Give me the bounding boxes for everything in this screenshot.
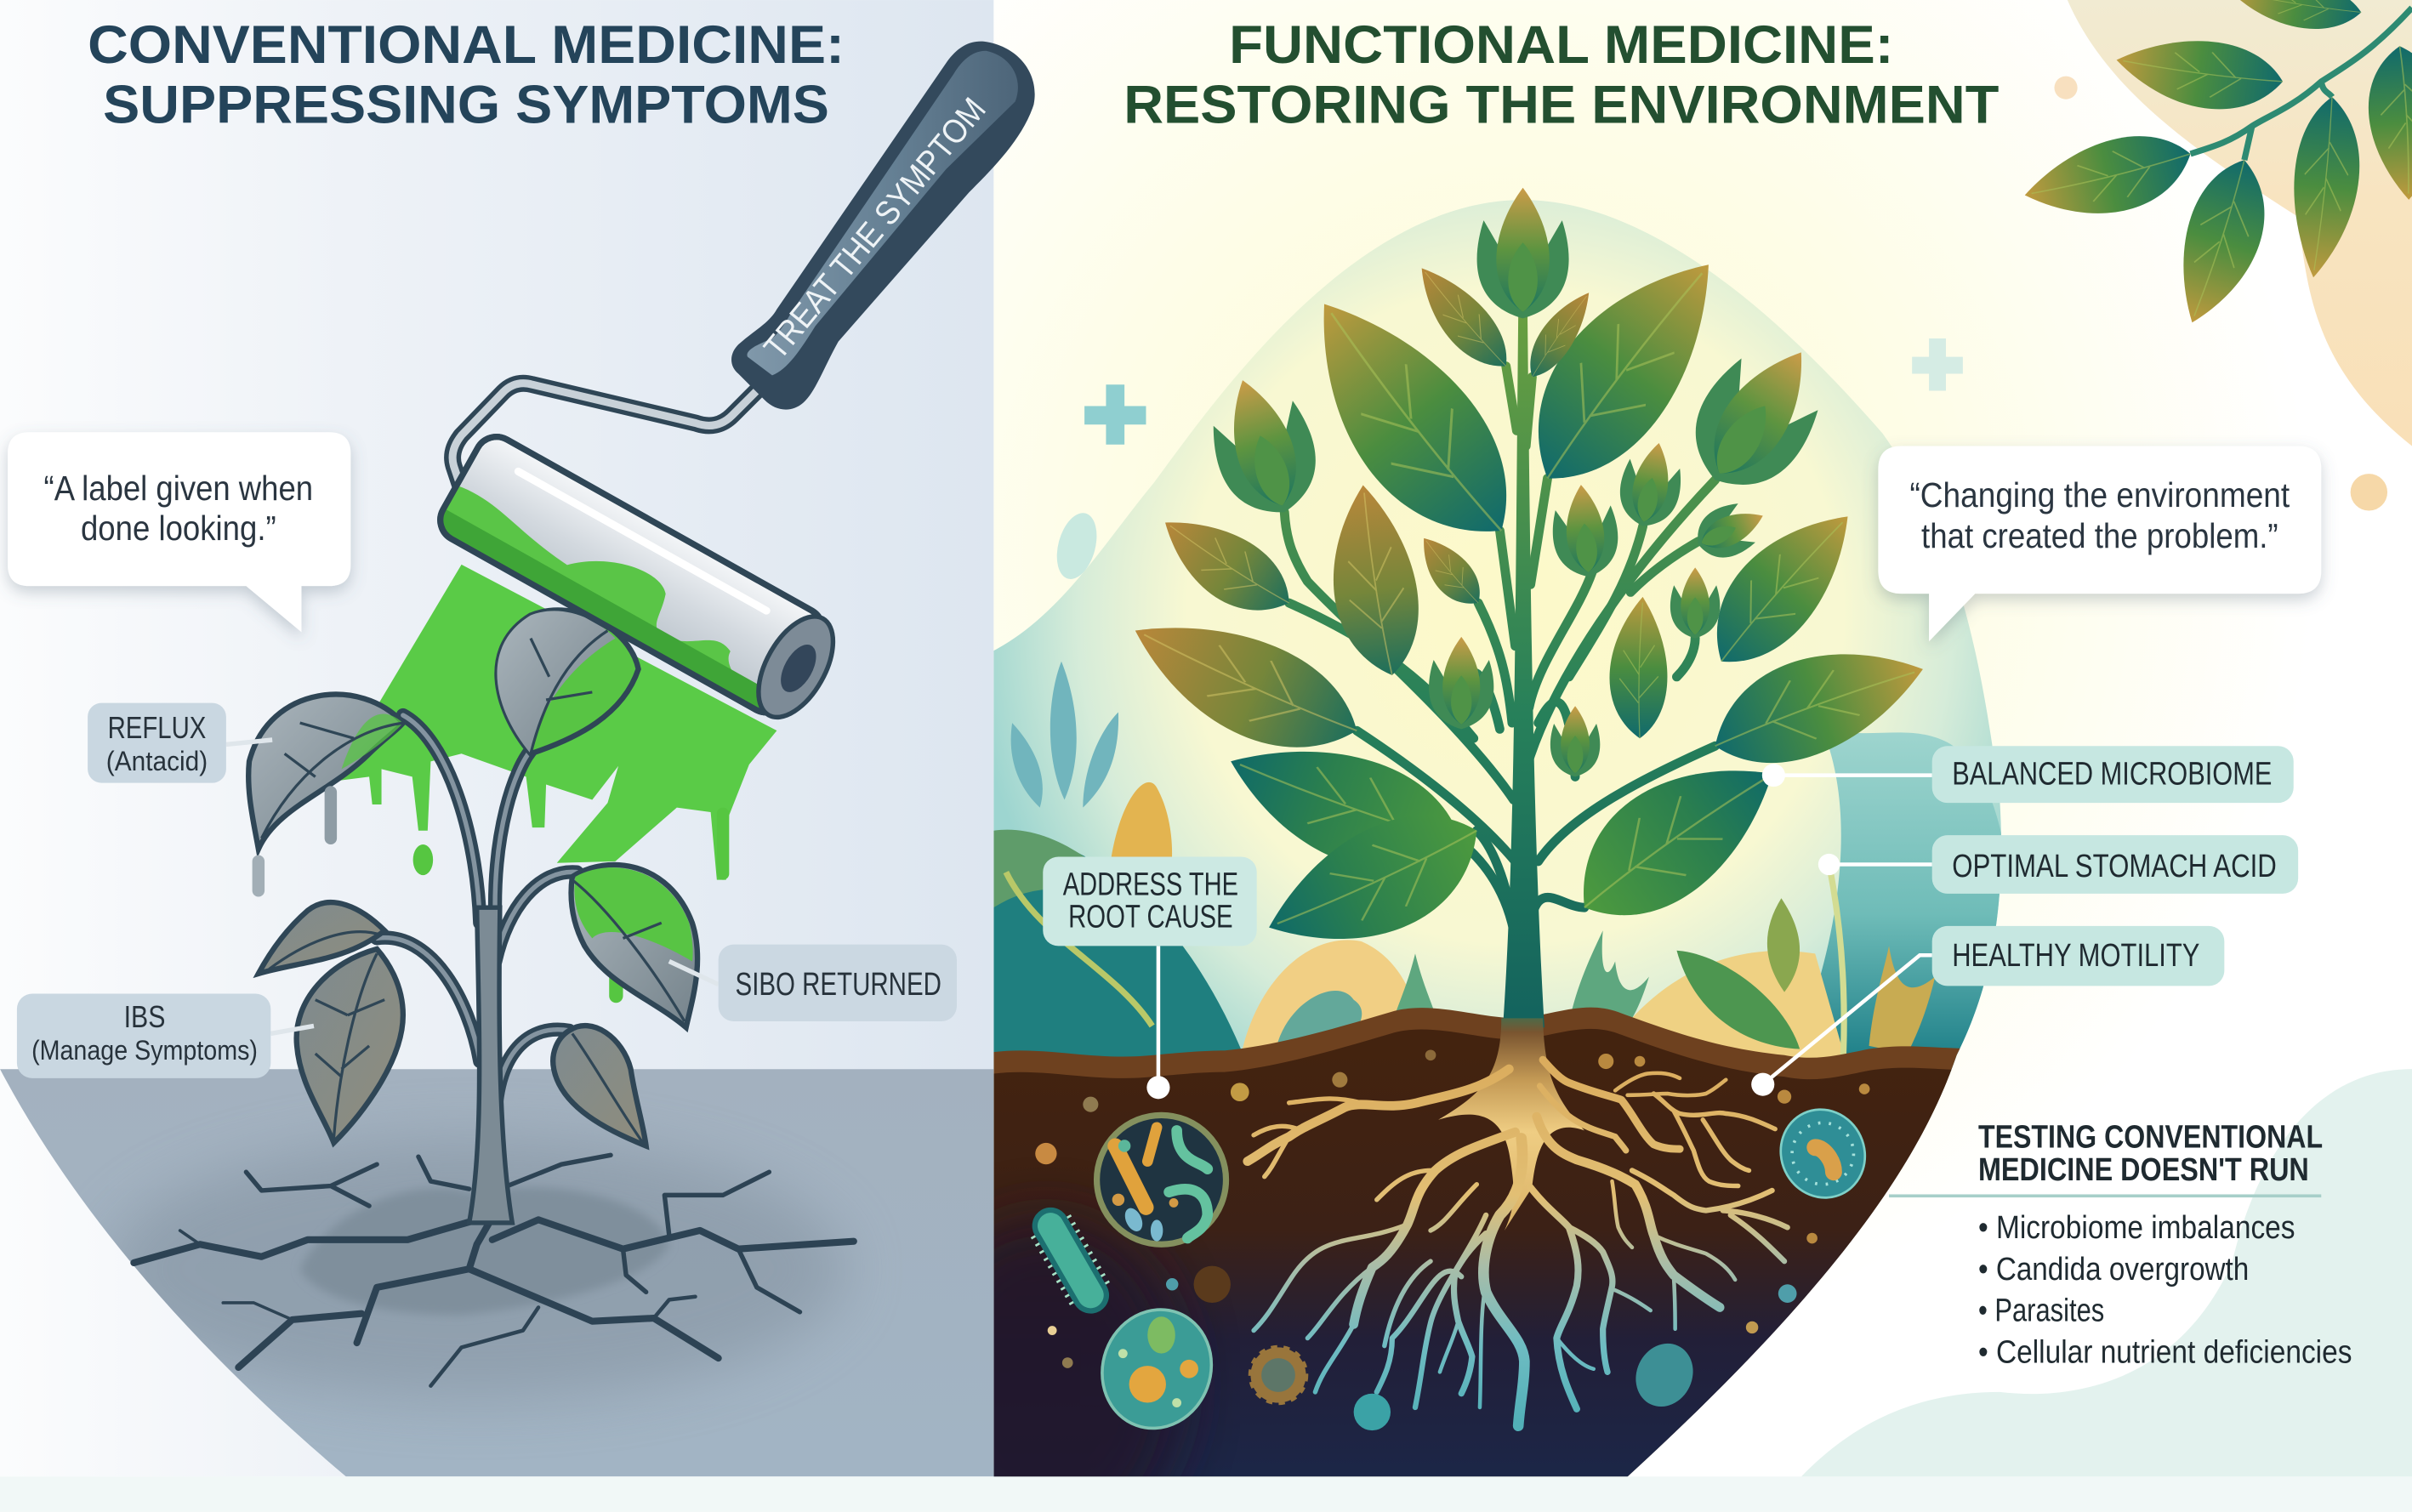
stems outline	[377, 715, 577, 1123]
label: balanced microbiome	[1932, 746, 2294, 803]
bud: horizontal	[1688, 493, 1773, 567]
paint roller	[433, 42, 1035, 730]
leaf: upper left big	[1271, 270, 1545, 571]
grey drop	[253, 855, 265, 896]
background teal shrub	[1277, 991, 1362, 1043]
text block: testing conventional medicine doesn't run	[1889, 1119, 2352, 1371]
soil surface band	[993, 1008, 1984, 1476]
leaf: right upper paint	[574, 867, 693, 961]
background hill right	[1633, 951, 1840, 1058]
connector: reflux	[226, 740, 272, 744]
label: address the root cause: ROOT CAUSE	[1068, 900, 1233, 935]
roots	[1248, 1018, 1788, 1426]
bud: right small	[1670, 567, 1720, 639]
background foliage left lime	[993, 830, 1084, 907]
leaf: small orange	[1408, 527, 1492, 617]
leaf: lower left dark	[1212, 717, 1477, 896]
title: conventional medicine	[88, 15, 845, 135]
grass	[1397, 930, 1649, 1017]
title: functional medicine	[1124, 15, 1999, 135]
label: IBS	[17, 993, 270, 1078]
speech bubble: label given: done looking.”	[81, 509, 276, 548]
leaf: far lower left	[1114, 591, 1374, 778]
leaf: far upper left	[1146, 498, 1305, 633]
leaf veins	[261, 631, 685, 1143]
leaf: upper centre grey half	[497, 611, 615, 753]
healthy plant	[1114, 188, 1938, 1027]
label: optimal stomach acid	[1932, 835, 2298, 894]
ground cracks	[134, 1155, 854, 1386]
leaf: lower left upper	[259, 902, 384, 974]
label: reflux: (Antacid)	[106, 746, 208, 776]
speech bubble: changing the environment: “Changing the environment	[1909, 475, 2290, 514]
background thin leaf right	[1767, 898, 1800, 992]
leaf: upper centre	[497, 610, 639, 753]
panel: conventional medicine	[0, 0, 993, 1476]
title: conventional medicine: SUPPRESSING SYMPTOMS	[103, 76, 829, 135]
leaf: far right	[1698, 621, 1938, 787]
leaf: mid right	[1687, 487, 1876, 686]
speech bubble: label given	[8, 432, 350, 632]
leaf: top left paint	[342, 713, 403, 769]
panel: functional medicine	[907, 0, 2412, 1512]
wilted plant	[248, 610, 697, 1223]
handle label: TREAT THE SYMPTOM	[757, 91, 993, 367]
decorative plus: left	[1084, 384, 1146, 445]
connector: IBS	[270, 1026, 314, 1033]
leaf: right upper	[572, 865, 697, 1027]
microbe: bacillus	[1050, 1226, 1090, 1295]
decorative blob: top right beige	[2068, 0, 2412, 446]
leaf: lower right	[1550, 725, 1801, 948]
label: healthy motility	[1932, 926, 2224, 986]
grass gold	[1869, 946, 1935, 1054]
plant illustration disc	[993, 201, 2001, 1476]
leaf: mid left	[1318, 480, 1429, 682]
decorative blob: lower right mint	[1801, 1069, 2412, 1476]
stems inner	[377, 715, 577, 1123]
title: functional medicine: FUNCTIONAL MEDICINE:	[1229, 15, 1893, 75]
microbe: spiked	[1250, 1347, 1306, 1403]
root crown	[1438, 1018, 1584, 1231]
microbe: large cell	[1086, 1294, 1228, 1444]
thin pale stem right	[1830, 873, 1844, 1089]
speech bubble: changing the environment	[1878, 446, 2321, 641]
roller cylinder	[433, 429, 849, 730]
speech bubble: changing the environment: that created the problem.”	[1921, 516, 2278, 555]
main stem	[1503, 315, 1544, 1027]
leaf: top left	[248, 695, 403, 849]
decorative dot	[2351, 474, 2387, 511]
leaf: centre right	[1608, 596, 1669, 739]
lime curve	[1006, 873, 1152, 1026]
microbe: small ball	[1354, 1394, 1391, 1430]
connector: root cause	[1146, 946, 1169, 1099]
background hill left	[1243, 940, 1407, 1049]
title: functional medicine: RESTORING THE ENVIRONMENT	[1124, 76, 1999, 135]
green paint swath	[333, 565, 777, 880]
bud: top	[1477, 188, 1569, 318]
background banana shape	[1111, 782, 1172, 857]
speech bubble: label given: “A label given when	[44, 469, 313, 508]
label: IBS: IBS	[124, 999, 165, 1034]
background pale leaves	[1011, 662, 1118, 808]
microbe: oval	[1625, 1334, 1704, 1416]
label: address the root cause: ADDRESS THE	[1063, 867, 1238, 903]
label: SIBO returned	[719, 945, 957, 1021]
leaf: lower left	[297, 949, 403, 1143]
leaf: small right of bud	[1517, 282, 1601, 385]
branch: top right	[2017, 0, 2412, 335]
label: reflux	[88, 703, 226, 783]
soil particles	[1035, 1049, 1869, 1368]
green paint drop	[413, 844, 433, 875]
main stem	[469, 907, 512, 1223]
connector: balanced microbiome	[1762, 764, 1932, 787]
soil body	[993, 1029, 1984, 1498]
leaf: upper right big	[1498, 227, 1750, 509]
bottom strip	[0, 1476, 2412, 1512]
label: optimal stomach acid: OPTIMAL STOMACH ACID	[1952, 849, 2277, 884]
connector: motility	[1751, 955, 1932, 1096]
microbe: oval with bean	[1766, 1095, 1880, 1212]
soil shading left	[907, 1215, 1185, 1512]
decorative oval	[1050, 509, 1103, 583]
bud: lower	[1550, 706, 1600, 776]
handle grip	[731, 42, 1035, 410]
leaf: lower left second	[1249, 787, 1501, 979]
text block: testing conventional medicine doesn't run: • Microbiome imbalances	[1978, 1210, 2295, 1246]
roller frame wire	[452, 384, 757, 489]
background foliage left teal	[993, 853, 1241, 1056]
leaf: lower right	[553, 1026, 646, 1145]
bud: centre left	[1429, 637, 1493, 729]
background leaf right	[1676, 951, 1800, 1049]
label: address the root cause	[1043, 856, 1257, 946]
microbe: round colony	[1097, 1115, 1226, 1244]
green paint drip on lower leaf	[609, 938, 623, 1003]
background foliage right	[1821, 732, 2001, 1077]
bud: right cluster	[1670, 322, 1846, 510]
cracked dry ground	[0, 1069, 993, 1476]
bud: centre	[1549, 482, 1621, 580]
text block: testing conventional medicine doesn't run: • Cellular nutrient deficiencies	[1978, 1335, 2352, 1371]
label: SIBO returned: SIBO RETURNED	[736, 967, 941, 1003]
text block: testing conventional medicine doesn't run: TESTING CONVENTIONAL	[1978, 1119, 2323, 1155]
decorative dot	[2054, 77, 2078, 99]
label: reflux: REFLUX	[108, 710, 206, 745]
text block: testing conventional medicine doesn't run: MEDICINE DOESN'T RUN	[1978, 1152, 2309, 1188]
bud: left cluster	[1197, 366, 1331, 527]
title: conventional medicine: CONVENTIONAL MEDICINE:	[88, 15, 845, 75]
text block: testing conventional medicine doesn't run: • Parasites	[1978, 1293, 2104, 1329]
connector: stomach acid	[1818, 854, 1932, 875]
bud: small	[1613, 437, 1688, 531]
soil dark spot	[1194, 1266, 1231, 1303]
green drip right	[717, 808, 729, 880]
branches	[1284, 367, 1715, 938]
label: healthy motility: HEALTHY MOTILITY	[1952, 938, 2199, 974]
text block: testing conventional medicine doesn't run: • Candida overgrowth	[1978, 1252, 2249, 1287]
grey drip	[325, 786, 337, 844]
label: IBS: (Manage Symptoms)	[31, 1035, 258, 1066]
decorative plus: right	[1912, 338, 1963, 390]
label: balanced microbiome: BALANCED MICROBIOME	[1952, 756, 2272, 792]
leaf: small left of bud	[1403, 254, 1522, 382]
connector: SIBO	[669, 961, 719, 985]
handle highlight	[747, 51, 1018, 375]
